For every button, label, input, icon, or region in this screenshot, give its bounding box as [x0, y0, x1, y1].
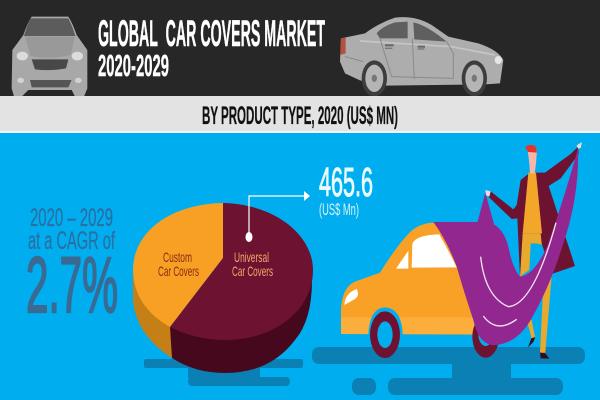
- pie side: universal: [170, 280, 312, 373]
- car body: [341, 223, 475, 335]
- rear wheel: [472, 316, 499, 358]
- man's hair: [525, 145, 537, 153]
- label: custom: Custom: [163, 249, 192, 265]
- man's hands: [485, 142, 582, 197]
- car headlight: [344, 289, 358, 305]
- CAGR text: [26, 204, 118, 329]
- man's neck and head: [528, 150, 537, 173]
- man's coat: [487, 147, 579, 277]
- front wheel: [370, 311, 400, 358]
- slice: universal car covers: [170, 203, 313, 340]
- car cover: [433, 148, 578, 345]
- car windows: [412, 234, 457, 268]
- callout value: (US$ Mn): [319, 200, 359, 219]
- subheading band: [0, 96, 600, 133]
- wheel arches: [368, 307, 403, 335]
- CAGR text: at a CAGR of: [28, 227, 115, 255]
- man's legs: [520, 232, 552, 359]
- callout value: 465.6: [319, 159, 373, 205]
- label: custom: [158, 249, 199, 279]
- CAGR text: 2020 – 2029: [30, 204, 113, 232]
- callout value: [319, 159, 373, 219]
- label: universal: Car Covers: [232, 263, 273, 279]
- label: universal: [232, 249, 273, 279]
- pie chart: [133, 203, 313, 373]
- illustration: car and man with cover: [341, 142, 582, 359]
- callout arrow: [246, 191, 310, 242]
- car cover fold: [477, 193, 494, 224]
- icon: car front view: [12, 17, 87, 97]
- icon: car side view: [340, 17, 503, 96]
- man's shirt: [523, 173, 542, 233]
- cover highlights: [481, 223, 556, 307]
- header band: [0, 0, 600, 97]
- slice: custom car covers: [133, 203, 223, 327]
- CAGR text: 2.7%: [26, 240, 118, 329]
- ground shadows: [144, 347, 585, 395]
- label: universal: Universal: [234, 249, 269, 265]
- header band: 2020-2029: [98, 48, 169, 83]
- pie side: custom: [133, 270, 172, 358]
- label: custom: Car Covers: [158, 263, 199, 279]
